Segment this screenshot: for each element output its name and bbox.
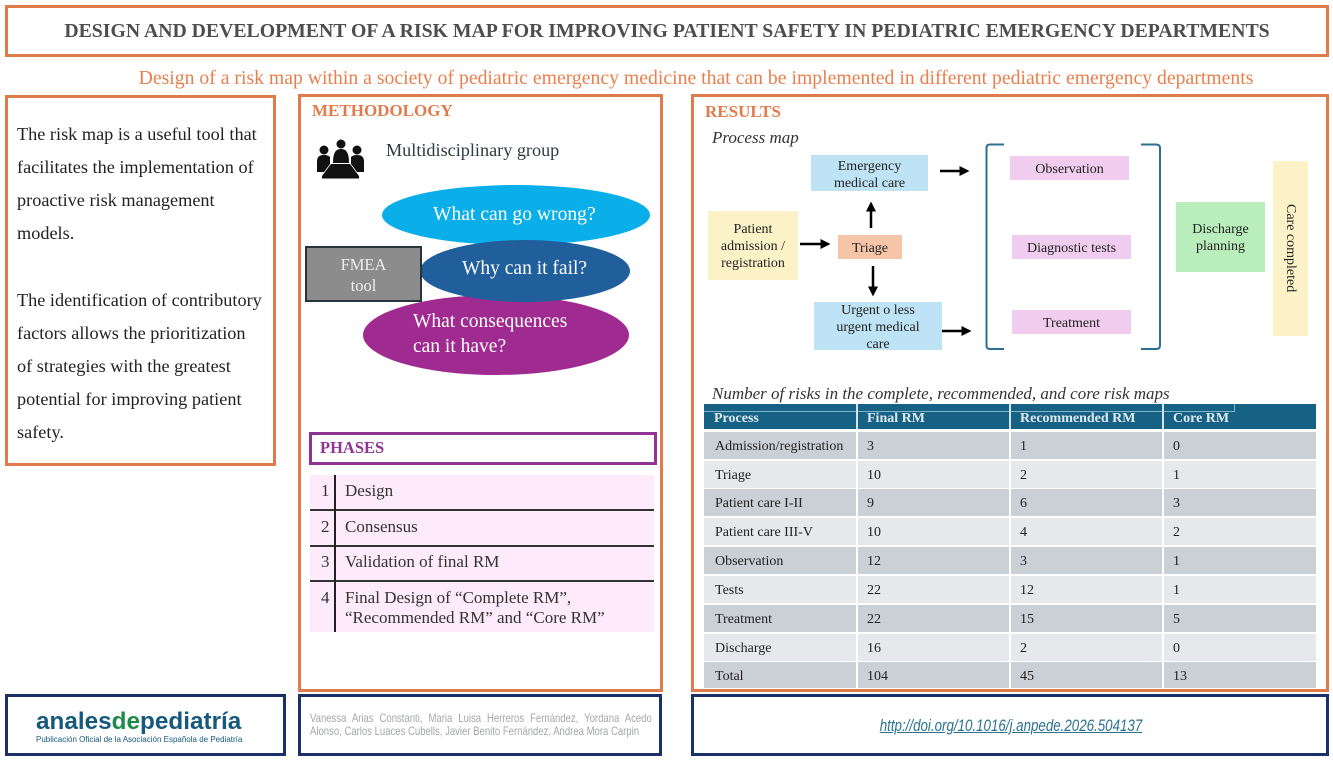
- process box: discharge planning: [1176, 202, 1265, 272]
- row: triage: 10: [867, 468, 881, 483]
- table: phases: [310, 475, 654, 632]
- process box: treatment: [1012, 310, 1131, 334]
- row: treatment: [704, 605, 1316, 632]
- arrow: triage down: [872, 266, 874, 294]
- process box: diagnostic tests: Diagnostic tests: [1027, 240, 1116, 256]
- row: discharge: 16: [867, 641, 881, 656]
- text block: risk map usefulness: proactive risk management: [17, 190, 215, 210]
- row: treatment: Treatment: [715, 612, 772, 627]
- row: patient care I-II: 9: [867, 496, 874, 511]
- row: admission: 1: [1020, 439, 1027, 454]
- process box: observation: Observation: [1035, 162, 1104, 176]
- process box: discharge planning: planning: [1196, 239, 1245, 254]
- row: triage: 2: [1020, 468, 1027, 483]
- text block: contributory factors: The identification of contributory: [17, 290, 262, 310]
- text: what consequences: can it have?: [413, 336, 506, 357]
- process box: patient admission: [708, 211, 798, 280]
- row: observation: Observation: [715, 554, 783, 569]
- phase 1: 1: [321, 481, 330, 500]
- logo tagline: Publicación Oficial de la Asociación Española de Pediatría: [36, 735, 242, 744]
- process box: urgent or less urgent care: care: [866, 336, 890, 352]
- text block: contributory factors: of strategies with the greatest: [17, 356, 231, 376]
- subheading: process map: Process map: [712, 128, 799, 147]
- text block: risk map usefulness: [17, 124, 257, 243]
- row: patient care III-V: 10: [867, 525, 881, 540]
- panel: authors: [298, 694, 662, 756]
- DOI text: http://doi.org/10.1016/j.anpede.2026.504137: [880, 717, 1142, 735]
- row: patient care III-V: [704, 518, 1316, 545]
- phase 4 text: [345, 588, 605, 627]
- row: patient care I-II: 3: [1173, 496, 1180, 511]
- process box: emergency medical care: medical care: [834, 176, 905, 191]
- panel: methodology: [298, 94, 663, 692]
- row: patient care I-II: Patient care I-II: [715, 496, 803, 511]
- table header: Process: [714, 411, 759, 426]
- table header: Final RM: [867, 411, 925, 426]
- text block: contributory factors: potential for improving patient: [17, 389, 242, 409]
- row: tests: 22: [867, 583, 881, 598]
- row: tests: Tests: [715, 583, 744, 598]
- text block: contributory factors: factors allows the prioritization: [17, 323, 246, 343]
- text: what consequences: [413, 311, 567, 357]
- row: admission: [704, 432, 1316, 459]
- row: observation: 3: [1020, 554, 1027, 569]
- phase 3 text: Validation of final RM: [345, 552, 499, 571]
- row: treatment: 15: [1020, 612, 1034, 627]
- row: treatment: 22: [867, 612, 881, 627]
- row: tests: 12: [1020, 583, 1034, 598]
- FMEA tool box: [305, 246, 422, 302]
- process box: diagnostic tests: [1012, 235, 1131, 259]
- process box: care completed: [1273, 161, 1308, 336]
- row: admission: 3: [867, 439, 874, 454]
- title banner: [5, 5, 1329, 57]
- row: total: Total: [715, 669, 744, 684]
- row: admission: Admission/registration: [715, 439, 843, 454]
- process box: urgent or less urgent care: [814, 302, 942, 350]
- left bracket: [986, 144, 1004, 349]
- row: observation: 12: [867, 554, 881, 569]
- row: discharge: 2: [1020, 641, 1027, 656]
- author list: Vanessa Arias Constanti, Maria Luisa Herreros Fernández, Yordana Acedo: [310, 711, 652, 725]
- row: observation: 1: [1173, 554, 1180, 569]
- row: total: [704, 662, 1316, 688]
- table header: Core RM: [1173, 411, 1229, 426]
- text block: contributory factors: safety.: [17, 422, 64, 442]
- phase 4: 4: [321, 588, 330, 607]
- table header: [704, 404, 1316, 429]
- process box: treatment: Treatment: [1043, 316, 1100, 330]
- diagram: FMEA questions: [363, 185, 650, 375]
- process box: urgent or less urgent care: Urgent o less: [841, 302, 915, 318]
- row: triage: 1: [1173, 468, 1180, 483]
- process box: triage: Triage: [852, 240, 888, 256]
- text block: contributory factors: [17, 290, 262, 442]
- process box: care completed: Care completed: [1283, 204, 1298, 293]
- arrow: triage up: [870, 204, 872, 228]
- row: total: 13: [1173, 669, 1187, 684]
- row: total: 104: [867, 669, 888, 684]
- row: patient care I-II: [704, 489, 1316, 516]
- row: patient care I-II: 6: [1020, 496, 1027, 511]
- heading: methodology: METHODOLOGY: [312, 101, 453, 120]
- phase 4 text: Final Design of “Complete RM”,: [345, 588, 571, 607]
- text block: risk map usefulness: models.: [17, 223, 74, 243]
- text block: risk map usefulness: The risk map is a useful tool that: [17, 124, 257, 144]
- row: admission: 0: [1173, 439, 1180, 454]
- heading: results: RESULTS: [705, 102, 781, 121]
- row: treatment: 5: [1173, 612, 1180, 627]
- ellipse: why can it fail: [420, 240, 630, 302]
- process box: triage: [838, 235, 902, 259]
- phase 1 text: Design: [345, 481, 393, 500]
- arrow: urgent care to bracket: [942, 330, 969, 332]
- row: discharge: [704, 634, 1316, 661]
- row: discharge: 0: [1173, 641, 1180, 656]
- subtitle: Design of a risk map within a society of pediatric emergency medicine that can be implemented in different pediatric emergency departments: [139, 67, 1253, 89]
- phase 4 text: “Recommended RM” and “Core RM”: [345, 608, 605, 627]
- phase 2 text: Consensus: [345, 517, 418, 536]
- process box: emergency medical care: Emergency: [838, 159, 901, 174]
- row: discharge: Discharge: [715, 641, 772, 656]
- process box: patient admission: admission /: [721, 239, 785, 254]
- panel: results: [691, 94, 1329, 692]
- row: triage: Triage: [715, 468, 751, 483]
- arrow: emergency care to bracket: [940, 170, 967, 172]
- FMEA tool box: tool: [351, 276, 376, 295]
- process box: observation: [1010, 156, 1129, 180]
- panel: journal logo: [5, 694, 286, 756]
- row: patient care III-V: 4: [1020, 525, 1027, 540]
- panel: conclusions: [5, 95, 276, 466]
- text: why can it fail: Why can it fail?: [462, 258, 587, 279]
- heading: phases: [309, 432, 657, 465]
- row: tests: [704, 576, 1316, 603]
- row: patient care III-V: Patient care III-V: [715, 525, 813, 540]
- row: triage: [704, 461, 1316, 488]
- ellipse: what can go wrong: [382, 185, 650, 245]
- phase 2: 2: [321, 517, 330, 536]
- process box: urgent or less urgent care: urgent medical: [836, 320, 920, 334]
- row: total: 45: [1020, 669, 1034, 684]
- author list: Alonso, Carlos Luaces Cubells, Javier Benito Fernández, Andrea Mora Carpin: [310, 724, 639, 738]
- arrow: admission to triage: [800, 243, 828, 245]
- right bracket: [1141, 144, 1160, 349]
- phase 3: 3: [321, 552, 330, 571]
- panel: DOI link: [691, 694, 1329, 756]
- process box: discharge planning: Discharge: [1192, 222, 1249, 237]
- process box: emergency medical care: [811, 155, 928, 191]
- text block: risk map usefulness: facilitates the implementation of: [17, 157, 254, 177]
- process box: patient admission: Patient: [734, 222, 772, 237]
- icon: group around a table: [317, 140, 364, 178]
- text: what can go wrong: What can go wrong?: [433, 204, 596, 225]
- row: observation: [704, 547, 1316, 574]
- row: tests: 1: [1173, 583, 1180, 598]
- subheading: number of risks: Number of risks in the complete, recommended, and core risk maps: [712, 384, 1170, 403]
- table: number of risks: [704, 404, 1316, 429]
- row: patient care III-V: 2: [1173, 525, 1180, 540]
- FMEA tool box: FMEA: [341, 255, 386, 274]
- ellipse: what consequences: [363, 295, 629, 375]
- process box: patient admission: registration: [721, 256, 785, 271]
- arrows and brackets: [800, 144, 1161, 350]
- heading: phases: PHASES: [320, 438, 384, 457]
- title banner: DESIGN AND DEVELOPMENT OF A RISK MAP FOR IMPROVING PATIENT SAFETY IN PEDIATRIC EMERGENCY DEPARTMENTS: [64, 20, 1270, 42]
- table header: Recommended RM: [1020, 411, 1135, 426]
- logo wordmark: analesdepediatría: [36, 708, 241, 735]
- text: what consequences: What consequences: [413, 311, 567, 332]
- author list: [310, 711, 652, 738]
- label: multidisciplinary group: Multidisciplinary group: [386, 140, 559, 160]
